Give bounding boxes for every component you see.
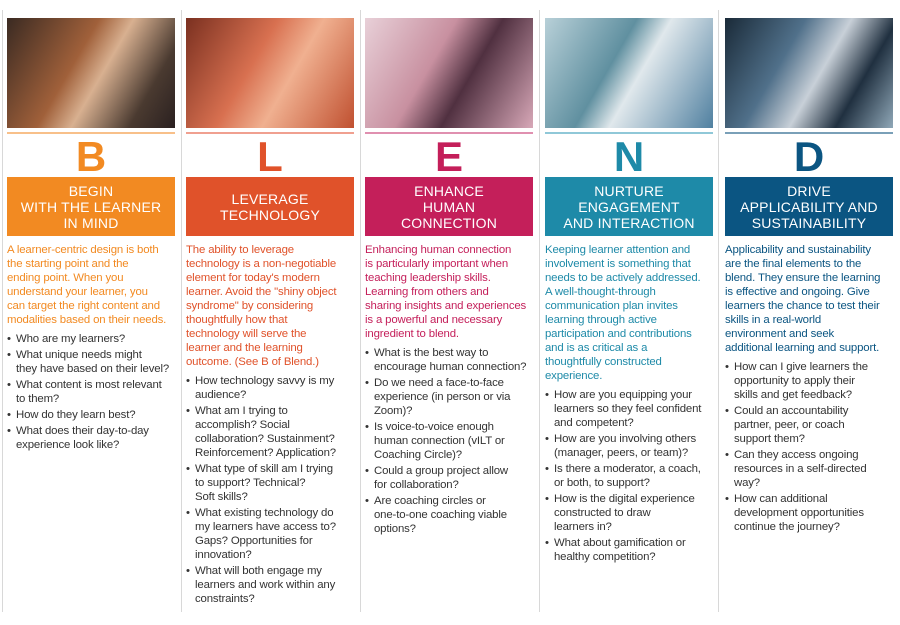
text L: technology will serve the (186, 328, 306, 340)
photo: video call (365, 18, 533, 128)
text N: learning through active (545, 314, 657, 326)
text B: experience look like? (16, 439, 119, 451)
text N: How are you equipping your (554, 389, 692, 401)
text D: development opportunities (734, 507, 864, 519)
panel: N (545, 18, 713, 563)
heading N: AND INTERACTION (563, 214, 695, 230)
text N: involvement is something that (545, 258, 691, 270)
panel: B (7, 18, 175, 451)
heading N: NURTURE (594, 182, 664, 198)
text B: What unique needs might (16, 349, 142, 361)
letter E: E (435, 133, 463, 180)
text D: skills in a real-world (725, 314, 821, 326)
text D: are the final elements to the (725, 258, 861, 270)
text L: learner. Avoid the "shiny object (186, 286, 336, 298)
text N: and is as critical as a (545, 342, 647, 354)
text N: How are you involving others (554, 433, 696, 445)
text N: What about gamification or (554, 537, 686, 549)
text D: Could an accountability (734, 405, 848, 417)
text D (725, 244, 880, 533)
text B (7, 244, 169, 451)
text L: Gaps? Opportunities for (195, 535, 312, 547)
heading D: DRIVE (787, 182, 831, 198)
text B: What content is most relevant (16, 379, 162, 391)
text L: The ability to leverage (186, 244, 294, 256)
text D: environment and seek (725, 328, 834, 340)
text L: syndrome" by considering (186, 300, 313, 312)
photo: VR headset (545, 18, 713, 128)
text L: technology is a non-negotiable (186, 258, 336, 270)
text L: Reinforcement? Application? (195, 447, 336, 459)
letter L: L (257, 133, 283, 180)
letter N: N (614, 133, 644, 180)
heading N (545, 177, 713, 236)
letter D: D (794, 133, 824, 180)
text D: support them? (734, 433, 805, 445)
text E: sharing insights and experiences (365, 300, 526, 312)
text N: needs to be actively addressed. (545, 272, 701, 284)
text L: my learners have access to? (195, 521, 336, 533)
text E: Is voice-to-voice enough (374, 421, 494, 433)
heading L: TECHNOLOGY (220, 206, 320, 222)
text L: What am I trying to (195, 405, 288, 417)
text B: modalities based on their needs. (7, 314, 166, 326)
heading E: CONNECTION (401, 214, 497, 230)
text B: Who are my learners? (16, 333, 125, 345)
text D: opportunity to apply their (734, 375, 855, 387)
text D: How can additional (734, 493, 828, 505)
heading L (186, 177, 354, 236)
heading B: BEGIN (69, 182, 113, 198)
text D: resources in a self-directed (734, 463, 867, 475)
text E: Coaching Circle)? (374, 449, 462, 461)
text L: audience? (195, 389, 246, 401)
text N: A well-thought-through (545, 286, 656, 298)
text N: experience. (545, 370, 602, 382)
text E: teaching leadership skills. (365, 272, 491, 284)
heading E: ENHANCE (414, 182, 484, 198)
heading L: LEVERAGE (231, 190, 309, 206)
text L: How technology savvy is my (195, 375, 334, 387)
text L: outcome. (See B of Blend.) (186, 356, 319, 368)
text B: they have based on their level? (16, 363, 169, 375)
text D: blend. They ensure the learning (725, 272, 880, 284)
text N: and competent? (554, 417, 634, 429)
text L: What type of skill am I trying (195, 463, 333, 475)
photo: headset man (725, 18, 893, 128)
text E: Learning from others and (365, 286, 489, 298)
heading E (365, 177, 533, 236)
text B: How do they learn best? (16, 409, 135, 421)
text B: understand your learner, you (7, 286, 148, 298)
heading D: SUSTAINABILITY (752, 214, 866, 230)
text E: Are coaching circles or (374, 495, 486, 507)
text L: accomplish? Social (195, 419, 290, 431)
text L: to support? Technical? (195, 477, 305, 489)
text D: is effective and ongoing. Give (725, 286, 870, 298)
text D: partner, peer, or coach (734, 419, 845, 431)
letter B: B (76, 133, 106, 180)
photo: technology (186, 18, 354, 128)
text E: Zoom)? (374, 405, 412, 417)
heading D: APPLICABILITY AND (740, 198, 878, 214)
text B: to them? (16, 393, 59, 405)
text B: can target the right content and (7, 300, 160, 312)
text D: Applicability and sustainability (725, 244, 871, 256)
text N: constructed to draw (554, 507, 651, 519)
text N: learners in? (554, 521, 612, 533)
text E: ingredient to blend. (365, 328, 459, 340)
text N: Keeping learner attention and (545, 244, 690, 256)
text N: learners so they feel confident (554, 403, 701, 415)
text N: or both, to support? (554, 477, 650, 489)
text D: Can they access ongoing (734, 449, 858, 461)
text N: thoughtfully constructed (545, 356, 662, 368)
text E: options? (374, 523, 416, 535)
text N: How is the digital experience (554, 493, 695, 505)
text N (545, 244, 702, 563)
text N: (manager, peers, or team)? (554, 447, 688, 459)
heading E: HUMAN (423, 198, 475, 214)
text L: Soft skills? (195, 491, 248, 503)
text L: thoughtfully how that (186, 314, 287, 326)
text E (365, 244, 526, 535)
text E: Enhancing human connection (365, 244, 511, 256)
heading B: WITH THE LEARNER (21, 198, 161, 214)
text E: human connection (vILT or (374, 435, 505, 447)
heading B (7, 177, 175, 236)
text E: Do we need a face-to-face (374, 377, 504, 389)
text E: is particularly important when (365, 258, 508, 270)
text L: learners and work within any (195, 579, 335, 591)
text D: way? (734, 477, 760, 489)
text B: What does their day-to-day (16, 425, 149, 437)
text L: What existing technology do (195, 507, 333, 519)
text N: participation and contributions (545, 328, 692, 340)
heading D (725, 177, 893, 236)
text L: constraints? (195, 593, 255, 605)
text N: communication plan invites (545, 300, 678, 312)
text E: for collaboration? (374, 479, 459, 491)
heading B: IN MIND (63, 214, 119, 230)
panel: L (186, 18, 354, 605)
photo: learners (7, 18, 175, 128)
text D: skills and get feedback? (734, 389, 852, 401)
text D: additional learning and support. (725, 342, 879, 354)
text D: learners the chance to test their (725, 300, 880, 312)
text L: collaboration? Sustainment? (195, 433, 335, 445)
panel: D (725, 18, 893, 533)
text L: What will both engage my (195, 565, 322, 577)
text E: Could a group project allow (374, 465, 508, 477)
text E: one-to-one coaching viable (374, 509, 507, 521)
text B: the starting point and the (7, 258, 128, 270)
text L: learner and the learning (186, 342, 303, 354)
text E: is a powerful and necessary (365, 314, 502, 326)
text N: Is there a moderator, a coach, (554, 463, 701, 475)
text L (186, 244, 336, 605)
text B: A learner-centric design is both (7, 244, 159, 256)
text E: experience (in person or via (374, 391, 510, 403)
panel: E (365, 18, 533, 535)
text L: innovation? (195, 549, 252, 561)
text E: What is the best way to (374, 347, 488, 359)
text E: encourage human connection? (374, 361, 526, 373)
text B: ending point. When you (7, 272, 123, 284)
text N: healthy competition? (554, 551, 655, 563)
heading N: ENGAGEMENT (578, 198, 680, 214)
text D: How can I give learners the (734, 361, 868, 373)
text D: continue the journey? (734, 521, 840, 533)
text L: element for today's modern (186, 272, 320, 284)
